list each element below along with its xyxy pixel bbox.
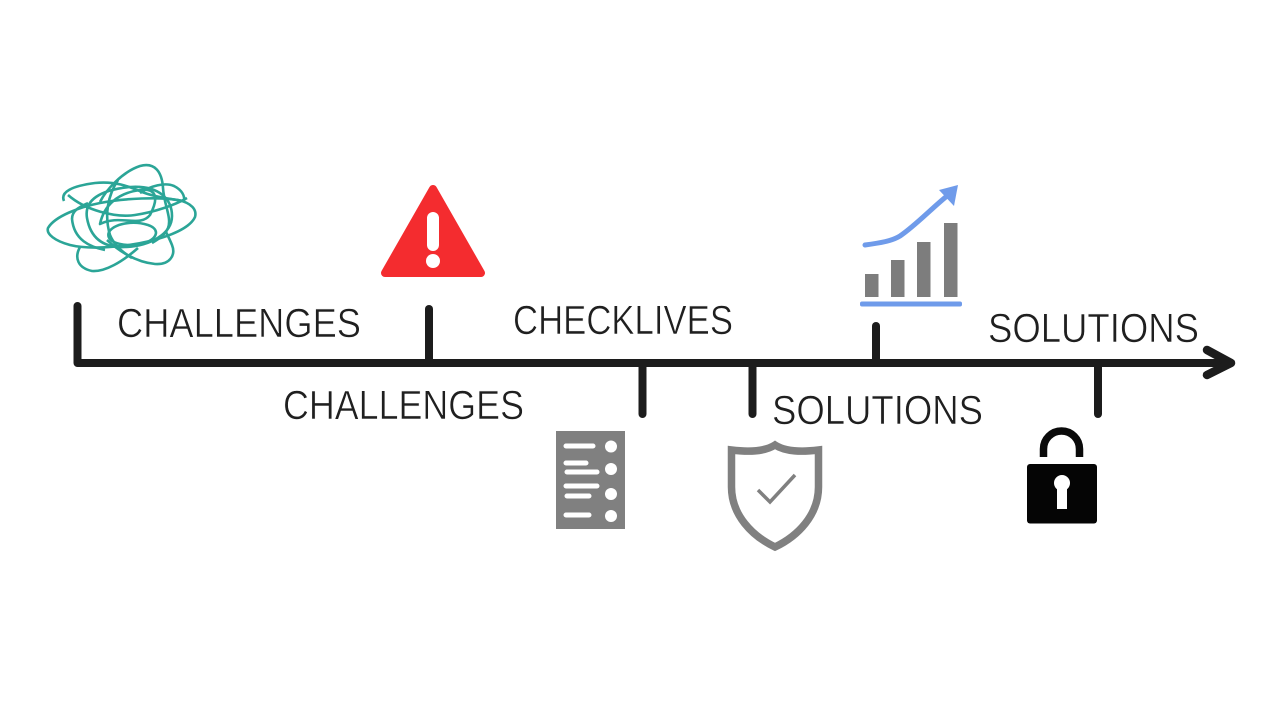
label: solutions upper: SOLUTIONS <box>988 305 1199 351</box>
icon: checklist document <box>556 431 625 529</box>
timeline arrow <box>78 306 1231 414</box>
label: challenges lower: CHALLENGES <box>283 382 524 428</box>
icon: rising bar chart <box>860 185 962 306</box>
icon: red warning triangle <box>385 189 481 273</box>
icon: tangled scribble <box>48 165 195 271</box>
label: challenges upper: CHALLENGES <box>117 300 361 346</box>
label: checklives: CHECKLIVES <box>513 297 733 343</box>
icon: shield with check <box>732 445 818 547</box>
label: solutions lower: SOLUTIONS <box>772 387 983 433</box>
icon: padlock <box>1027 431 1097 524</box>
